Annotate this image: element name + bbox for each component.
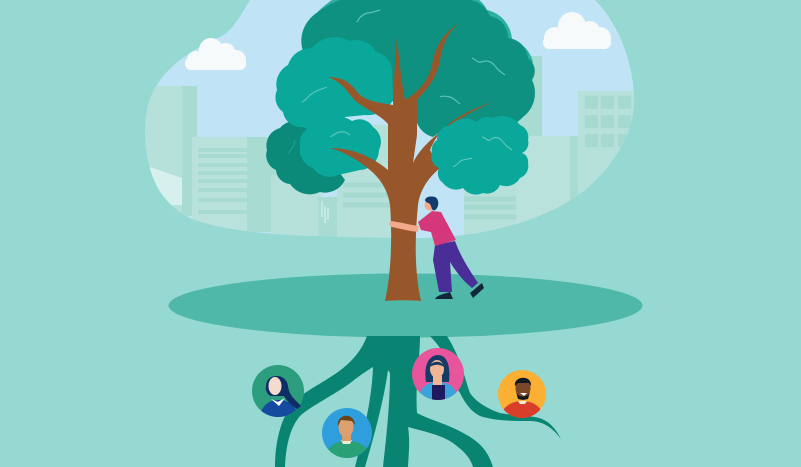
person: hair bbox=[425, 196, 438, 210]
canopy: back dark bbox=[301, 0, 535, 137]
canopy: back light rim bbox=[308, 0, 533, 90]
person: legs bbox=[433, 241, 478, 292]
cloud: left bbox=[185, 38, 246, 70]
building: right grid block bbox=[578, 91, 634, 195]
cloud: right bbox=[543, 12, 611, 49]
sky and city scene bbox=[130, 0, 650, 247]
building: far left tower bbox=[145, 86, 197, 216]
avatar: woman on green bbox=[252, 365, 304, 420]
root: far right bbox=[430, 336, 561, 439]
person: shoes bbox=[435, 283, 484, 299]
person: shirt bbox=[418, 211, 456, 246]
avatar: man on orange bbox=[498, 370, 546, 420]
avatar: woman on pink bbox=[412, 348, 464, 400]
building: right tower behind tree bbox=[464, 56, 578, 235]
canopy: right bbox=[431, 116, 528, 195]
canopy: upper left bbox=[275, 37, 393, 131]
tree bbox=[266, 0, 535, 301]
illustration: person hugging a tree with community roots bbox=[145, 0, 642, 467]
ground ellipse bbox=[168, 274, 642, 338]
person hugging the tree bbox=[390, 196, 484, 299]
canopy: low left front bbox=[300, 116, 381, 177]
person: arm bbox=[390, 221, 419, 232]
leaf highlights bbox=[288, 10, 512, 167]
root: main mass with left, centre and right branches bbox=[275, 336, 493, 467]
building: centre low block bbox=[271, 125, 391, 238]
avatar: man on blue bbox=[322, 408, 372, 460]
roots bbox=[275, 336, 561, 467]
person: head bbox=[424, 200, 436, 210]
trunk and branches bbox=[328, 23, 493, 301]
canopy: low left dark bbox=[266, 121, 345, 194]
sky bbox=[130, 0, 650, 245]
building: left block bbox=[192, 137, 278, 232]
